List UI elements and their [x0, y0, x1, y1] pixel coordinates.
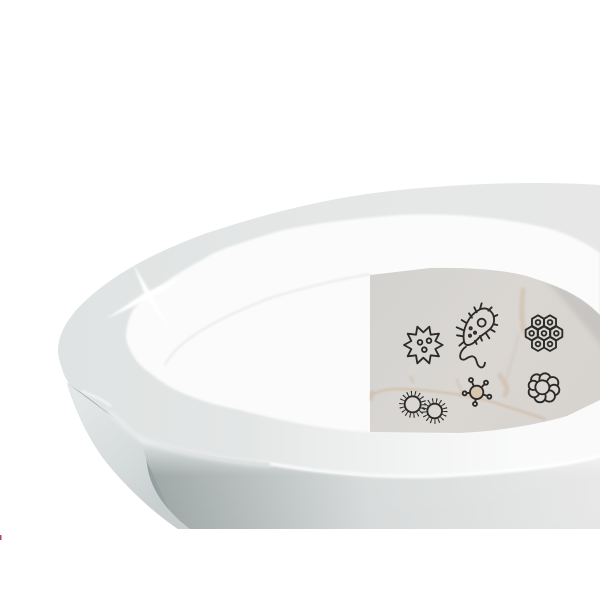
bowl body — [67, 383, 600, 529]
outer rim — [58, 183, 600, 475]
icon: molecule — [463, 378, 491, 406]
stain marks — [371, 290, 545, 419]
rim front light — [354, 400, 600, 474]
germ icons — [402, 303, 562, 421]
dark corner shade — [549, 284, 600, 344]
icon: twin spiky bacteria — [402, 393, 445, 421]
rim edge glint — [82, 391, 111, 406]
illustration: toilet bowl half clean half germs — [0, 183, 600, 540]
rim crease soft shadow edge — [110, 412, 272, 465]
icon: cell cluster — [529, 373, 559, 402]
panel: stained half — [370, 260, 600, 440]
icon: honeycomb cells — [526, 315, 562, 351]
icon: sparkle — [110, 268, 158, 316]
body side facet — [67, 383, 190, 529]
icon: spiky virus — [404, 327, 443, 363]
red edge mark — [0, 535, 2, 540]
clean bowl shading — [165, 274, 370, 365]
rim crease highlight — [270, 456, 600, 476]
icon: paramecium — [457, 303, 497, 367]
toilet bowl — [58, 183, 600, 529]
inner slope — [126, 214, 600, 433]
